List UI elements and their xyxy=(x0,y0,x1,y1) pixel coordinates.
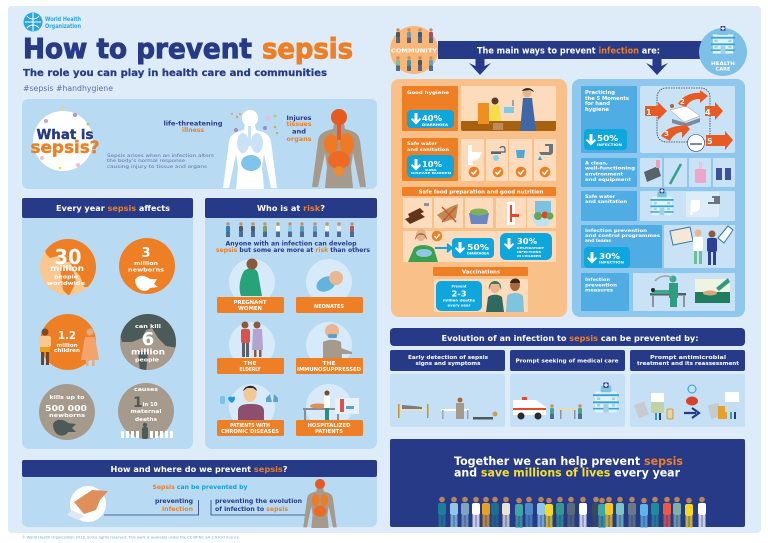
good hygiene: 40% xyxy=(422,114,442,123)
risk group: pregnant women: PREGNANT xyxy=(234,300,267,306)
header: every year sepsis affects: Every year sepsis affects xyxy=(56,203,170,213)
preventing the evolution xyxy=(211,499,305,515)
call-to-action text xyxy=(454,454,683,480)
stat: 3 million newborns: newborns xyxy=(128,268,165,274)
infection prevention measures: prevention xyxy=(585,282,617,288)
stat: causes 1 in 10 maternal deaths: deaths xyxy=(135,417,158,423)
panel: how and where xyxy=(22,477,377,528)
arrow: to community xyxy=(469,57,491,75)
header: how and where xyxy=(22,460,377,477)
infection prevention programmes: and control programmes xyxy=(585,233,660,239)
stat: can kill 6 million people: 6 xyxy=(142,329,154,350)
breastfeeding tile: INFECTIONS xyxy=(517,250,541,254)
arrow: to health care xyxy=(646,57,668,75)
five moments: hygiene xyxy=(585,107,610,113)
health care badge xyxy=(699,26,747,76)
stat: can kill 6 million people xyxy=(120,314,176,370)
five moments xyxy=(581,86,637,153)
infection prevention programmes: Infection prevention xyxy=(585,228,647,234)
stat: kills up to 500 000 newborns xyxy=(39,384,95,440)
stat: causes 1 in 10 maternal deaths: causes xyxy=(134,387,159,393)
stat: causes 1 in 10 maternal deaths: in 10 xyxy=(142,402,158,408)
risk statement: Anyone with an infection can develop xyxy=(226,240,357,248)
panel: what is sepsis xyxy=(22,99,377,189)
banner: safe food preparation: Safe food preparation and good nutrition xyxy=(418,190,544,196)
safe water and sanitation: and sanitation xyxy=(407,147,449,153)
safe water and sanitation (health care) xyxy=(581,191,637,221)
stat: 1.2 million children xyxy=(39,314,99,370)
stat: 1.2 million children: million xyxy=(56,343,78,349)
good hygiene: DIARRHOEA xyxy=(422,123,448,127)
five moments: Practicing xyxy=(585,90,616,96)
clean environment: and equipment xyxy=(585,177,632,183)
header: evolution xyxy=(390,328,745,346)
what is sepsis badge: sepsis? xyxy=(30,138,100,157)
breastfeeding tile: RESPIRATORY xyxy=(517,246,545,250)
breastfeeding tile: 30% xyxy=(517,237,537,246)
evolution column: early detection: signs and symptoms xyxy=(416,361,481,367)
vaccination tile: every year xyxy=(448,302,471,308)
stat: 30 million people worldwide xyxy=(40,238,98,296)
header: who is at risk xyxy=(205,198,377,218)
stat: kills up to 500 000 newborns: 500 000 xyxy=(45,404,87,413)
header: every year sepsis affects xyxy=(22,198,193,218)
sepsis definition text xyxy=(107,153,215,170)
sepsis definition text: the body's normal response xyxy=(107,158,185,164)
risk statement xyxy=(216,240,370,254)
risk group: neonates: NEONATES xyxy=(314,304,345,310)
copyright notice: © World Health Organization 2018. Some rights reserved. This work is available under the CC BY-NC-SA 3.0 IGO licence. xyxy=(22,536,240,540)
five moments diagram: 1 xyxy=(646,108,652,117)
risk group: hospitalized patients: PATIENTS xyxy=(315,429,344,435)
title: sepsis xyxy=(262,32,353,65)
surgery illustration xyxy=(633,273,735,311)
evolution column: antimicrobial treatment xyxy=(630,350,745,427)
stat: 3 million newborns: 3 xyxy=(141,246,151,261)
clean environment xyxy=(581,158,637,187)
five moments: for hand xyxy=(585,101,611,107)
risk group: the immunosuppressed: THE xyxy=(322,361,336,367)
stat: kills up to 500 000 newborns: kills up to xyxy=(50,395,85,401)
panel: call to action xyxy=(390,439,745,528)
breastfeeding tile: IN CHILDREN xyxy=(517,254,542,258)
risk group: pregnant women xyxy=(217,258,284,313)
health care badge: HEALTH xyxy=(711,61,735,67)
panel: health care measures xyxy=(572,79,745,317)
preventing the evolution: of infection to sepsis xyxy=(215,507,289,513)
safe water and sanitation (health care): Safe water xyxy=(585,194,616,200)
small body icon xyxy=(303,479,337,528)
stat: can kill 6 million people: people xyxy=(135,358,159,364)
five moments diagram: 5 xyxy=(707,137,713,146)
sanitation tiles with checks xyxy=(461,139,556,181)
safe water and sanitation: DISEASE BURDEN xyxy=(411,171,452,175)
safe water and sanitation xyxy=(402,138,458,181)
team illustration xyxy=(664,225,735,268)
risk group: the elderly xyxy=(217,322,284,374)
crowd of people xyxy=(438,497,706,528)
evolution column: early detection: Early detection of sepsis xyxy=(408,355,488,361)
panel: who is at risk xyxy=(205,218,377,449)
prevented-by heading: Sepsis can be prevented by xyxy=(152,485,248,491)
vaccination tile: 2-3 xyxy=(452,290,466,298)
clean environment: environment xyxy=(585,172,624,178)
breastfeeding tile xyxy=(403,229,556,262)
risk group: patients with chronic diseases: CHRONIC DISEASES xyxy=(221,429,280,435)
header: how and where: How and where do we prevent sepsis ? xyxy=(110,465,288,474)
risk group: the immunosuppressed xyxy=(296,322,363,374)
five moments diagram: 4 xyxy=(705,108,711,117)
preventing infection xyxy=(104,499,198,515)
hands icon xyxy=(67,486,108,522)
sepsis definition text: Sepsis arises when an infection alters xyxy=(107,153,215,159)
stat: causes 1 in 10 maternal deaths xyxy=(118,383,174,439)
banner: main ways to prevent infection: The main ways to prevent infection are: xyxy=(477,46,660,56)
infection prevention measures: measures xyxy=(585,288,613,294)
preventing the evolution: preventing the evolution xyxy=(215,499,302,505)
risk statement: sepsis but some are more at risk than others xyxy=(216,247,370,254)
five moments diagram xyxy=(640,86,735,153)
five moments: INFECTION xyxy=(597,143,622,147)
subtitle: The role you can play in health care and communities xyxy=(23,68,327,79)
infection prevention programmes xyxy=(581,225,662,268)
risk group: patients with chronic diseases: PATIENTS WITH xyxy=(230,423,270,429)
breastfeeding tile: DIARRHOEA xyxy=(467,252,490,256)
banner: main ways to prevent infection xyxy=(438,41,704,59)
vaccination tile: Prevent xyxy=(452,284,467,288)
five moments diagram: 3 xyxy=(664,130,669,138)
equipment tiles xyxy=(640,158,735,187)
stat: 30 million people worldwide: 30 xyxy=(54,245,82,269)
white body with infection xyxy=(223,110,278,189)
food safety tiles xyxy=(403,198,556,228)
stat: 3 million newborns: million xyxy=(134,261,158,267)
stat: 30 million people worldwide: people xyxy=(54,274,78,280)
call-to-action text: Together we can help prevent sepsis xyxy=(454,454,683,468)
panel: community measures xyxy=(391,79,567,317)
injures tissues and organs label: and xyxy=(292,128,306,136)
evolution column: antimicrobial treatment: treatment and its reassessment xyxy=(637,361,740,367)
risk group: neonates xyxy=(296,259,363,313)
risk group: the elderly: THE xyxy=(244,361,256,367)
health care badge: CARE xyxy=(716,66,730,72)
clean environment: well-functioning xyxy=(585,166,635,172)
stat: kills up to 500 000 newborns: newborns xyxy=(49,413,86,419)
stat: 30 million people worldwide: worldwide xyxy=(47,281,85,287)
life-threatening illness label xyxy=(164,120,222,134)
community badge xyxy=(390,26,438,74)
infection prevention measures xyxy=(581,273,629,311)
risk group: the immunosuppressed: IMMUNOSUPPRESSED xyxy=(297,367,361,373)
stat: can kill 6 million people: can kill xyxy=(135,324,161,330)
infection prevention programmes: INFECTION xyxy=(599,260,624,264)
logo: World Health Organization: Organization xyxy=(45,24,81,30)
evolution column: prompt seeking xyxy=(510,350,625,427)
safe water and sanitation (health care): and sanitation xyxy=(585,199,627,205)
five moments: 50% xyxy=(597,134,618,143)
panel: affects stats xyxy=(22,218,193,449)
infection prevention programmes: 30% xyxy=(599,252,620,261)
title: How to prevent xyxy=(23,32,252,65)
evolution column: antimicrobial treatment: Prompt antimicrobial xyxy=(650,355,726,361)
vaccination tile: million deaths xyxy=(443,298,476,302)
risk group: patients with chronic diseases xyxy=(217,384,284,436)
logo: World Health Organization: World Health xyxy=(45,17,81,23)
risk group: pregnant women: WOMEN xyxy=(238,306,262,312)
stat: 30 million people worldwide: million xyxy=(50,264,84,273)
safe water and sanitation: 10% xyxy=(422,160,442,169)
preventing infection: preventing xyxy=(155,499,193,505)
life-threatening illness label: illness xyxy=(182,127,204,134)
stat: 3 million newborns xyxy=(119,238,175,294)
breastfeeding tile: 50% xyxy=(467,243,489,252)
five moments diagram: 2 xyxy=(680,98,685,106)
header: who is at risk: Who is at risk? xyxy=(257,203,325,213)
five moments: the 5 Moments xyxy=(585,96,629,102)
injures tissues and organs label: tissues xyxy=(286,121,312,128)
infection prevention measures: Infection xyxy=(585,277,610,283)
handwashing illustration xyxy=(461,86,556,131)
injures tissues and organs label: Injures xyxy=(286,115,312,122)
stat: causes 1 in 10 maternal deaths: 1 xyxy=(133,395,143,411)
clean environment: A clean, xyxy=(585,160,608,166)
hashtags: #sepsis #handhygiene xyxy=(23,84,113,93)
stat: can kill 6 million people: million xyxy=(131,348,165,356)
safe water and sanitation: Safe water xyxy=(407,141,438,147)
evolution column: prompt seeking: Prompt seeking of medical care xyxy=(516,358,619,364)
risk group: the elderly: ELDERLY xyxy=(240,367,261,373)
good hygiene xyxy=(402,86,458,131)
stat: 1.2 million children: children xyxy=(54,348,80,354)
what is sepsis badge xyxy=(30,107,100,171)
risk group: hospitalized patients xyxy=(296,384,363,436)
logo: World Health Organization xyxy=(24,12,81,32)
injures tissues and organs label: organs xyxy=(286,136,312,143)
injures tissues and organs label xyxy=(286,115,312,143)
infection prevention programmes: and teams xyxy=(585,238,611,244)
community badge: COMMUNITY xyxy=(391,48,438,54)
sepsis definition text: causing injury to tissue and organs xyxy=(107,164,208,170)
life-threatening illness label: life-threatening xyxy=(164,120,222,128)
stat: causes 1 in 10 maternal deaths: maternal xyxy=(130,409,162,415)
call-to-action text: and save millions of lives every year xyxy=(454,466,680,480)
evolution column: early detection xyxy=(390,350,505,427)
stat: 1.2 million children: 1.2 xyxy=(58,329,76,342)
hospital and sanitation tile xyxy=(640,189,735,221)
grey body with injured organs xyxy=(312,109,366,188)
banner: vaccinations: Vaccinations xyxy=(462,270,500,276)
banner: safe food preparation xyxy=(402,187,556,196)
risk group: hospitalized patients: HOSPITALIZED xyxy=(308,423,351,429)
safe water and sanitation: GLOBAL xyxy=(425,168,437,172)
vaccination tile xyxy=(434,278,528,312)
header: evolution: Evolution of an infection to sepsis can be prevented by: xyxy=(442,334,698,343)
preventing infection: infection xyxy=(162,507,193,513)
good hygiene: Good hygiene xyxy=(407,90,449,96)
banner: vaccinations xyxy=(433,267,528,276)
row of people xyxy=(226,222,354,237)
what is sepsis badge: What is xyxy=(36,127,94,143)
